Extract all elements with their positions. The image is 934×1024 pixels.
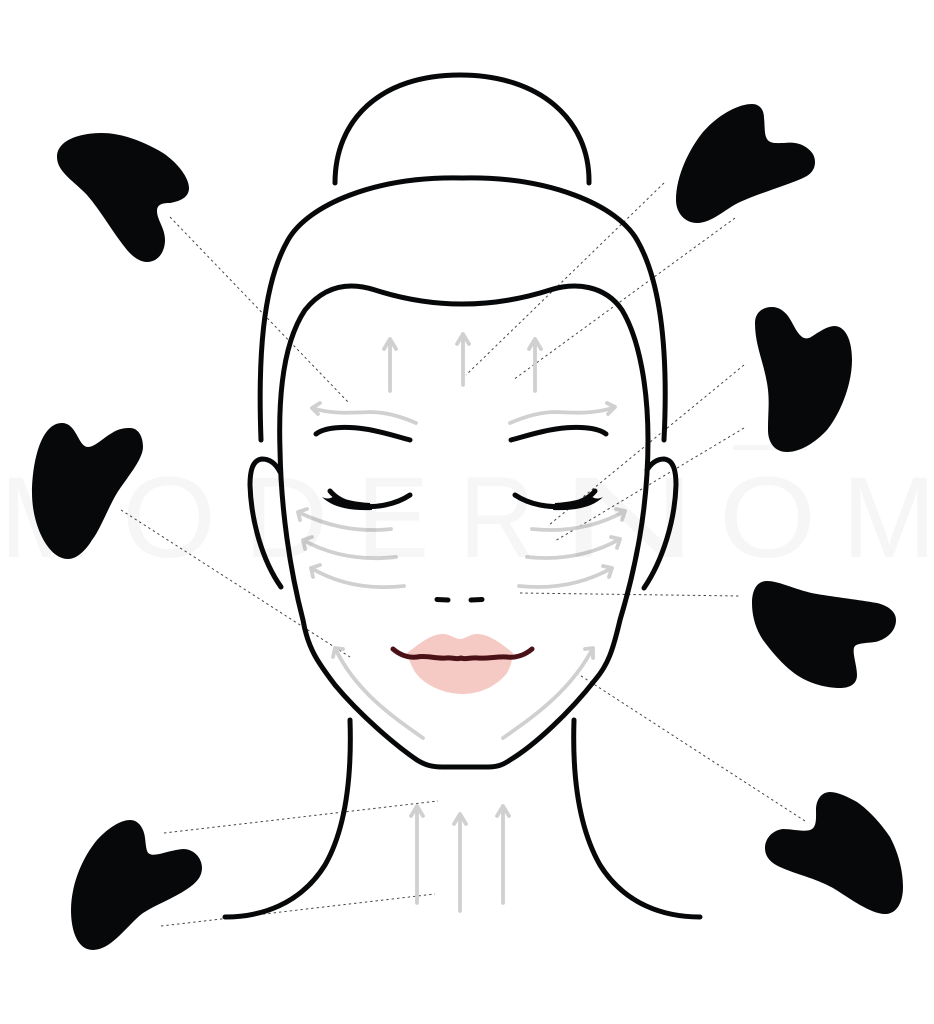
face outline <box>280 286 648 767</box>
gua sha stone: top right <box>676 104 815 223</box>
watermark: M <box>0 454 92 582</box>
gua sha stone: left middle <box>32 423 143 559</box>
right eyebrow <box>511 427 606 440</box>
jaw arrows <box>333 648 593 738</box>
watermark: E <box>357 454 429 582</box>
gua sha stone: right middle <box>752 581 896 688</box>
neck arrows <box>411 806 509 911</box>
massage direction arrows <box>298 334 625 911</box>
left eyebrow <box>316 427 410 440</box>
gua sha stone: bottom left <box>71 820 202 950</box>
gua sha stone: right upper <box>755 307 852 452</box>
neck left <box>225 720 350 917</box>
left cheek arrows <box>298 509 404 587</box>
hair outline <box>260 178 665 440</box>
left closed eye <box>322 491 410 510</box>
watermark: O <box>719 454 816 582</box>
left ear <box>250 459 281 587</box>
gua sha stone: top left <box>57 133 189 262</box>
nose <box>437 597 482 602</box>
watermark: R <box>459 454 535 582</box>
right ear <box>644 459 676 588</box>
right closed eye <box>515 491 603 510</box>
gua sha stone: bottom right <box>765 792 903 914</box>
face illustration <box>225 75 700 917</box>
watermark: N <box>560 454 698 582</box>
watermark: O <box>122 454 216 582</box>
eyebrow arrows <box>312 403 615 423</box>
neck right <box>574 720 700 917</box>
watermark <box>0 445 934 582</box>
forehead arrows <box>384 334 541 391</box>
watermark: D <box>244 454 328 582</box>
lips <box>393 634 532 694</box>
hair bun <box>335 75 589 183</box>
right cheek arrows <box>519 509 625 587</box>
dotted guide lines <box>121 183 805 926</box>
